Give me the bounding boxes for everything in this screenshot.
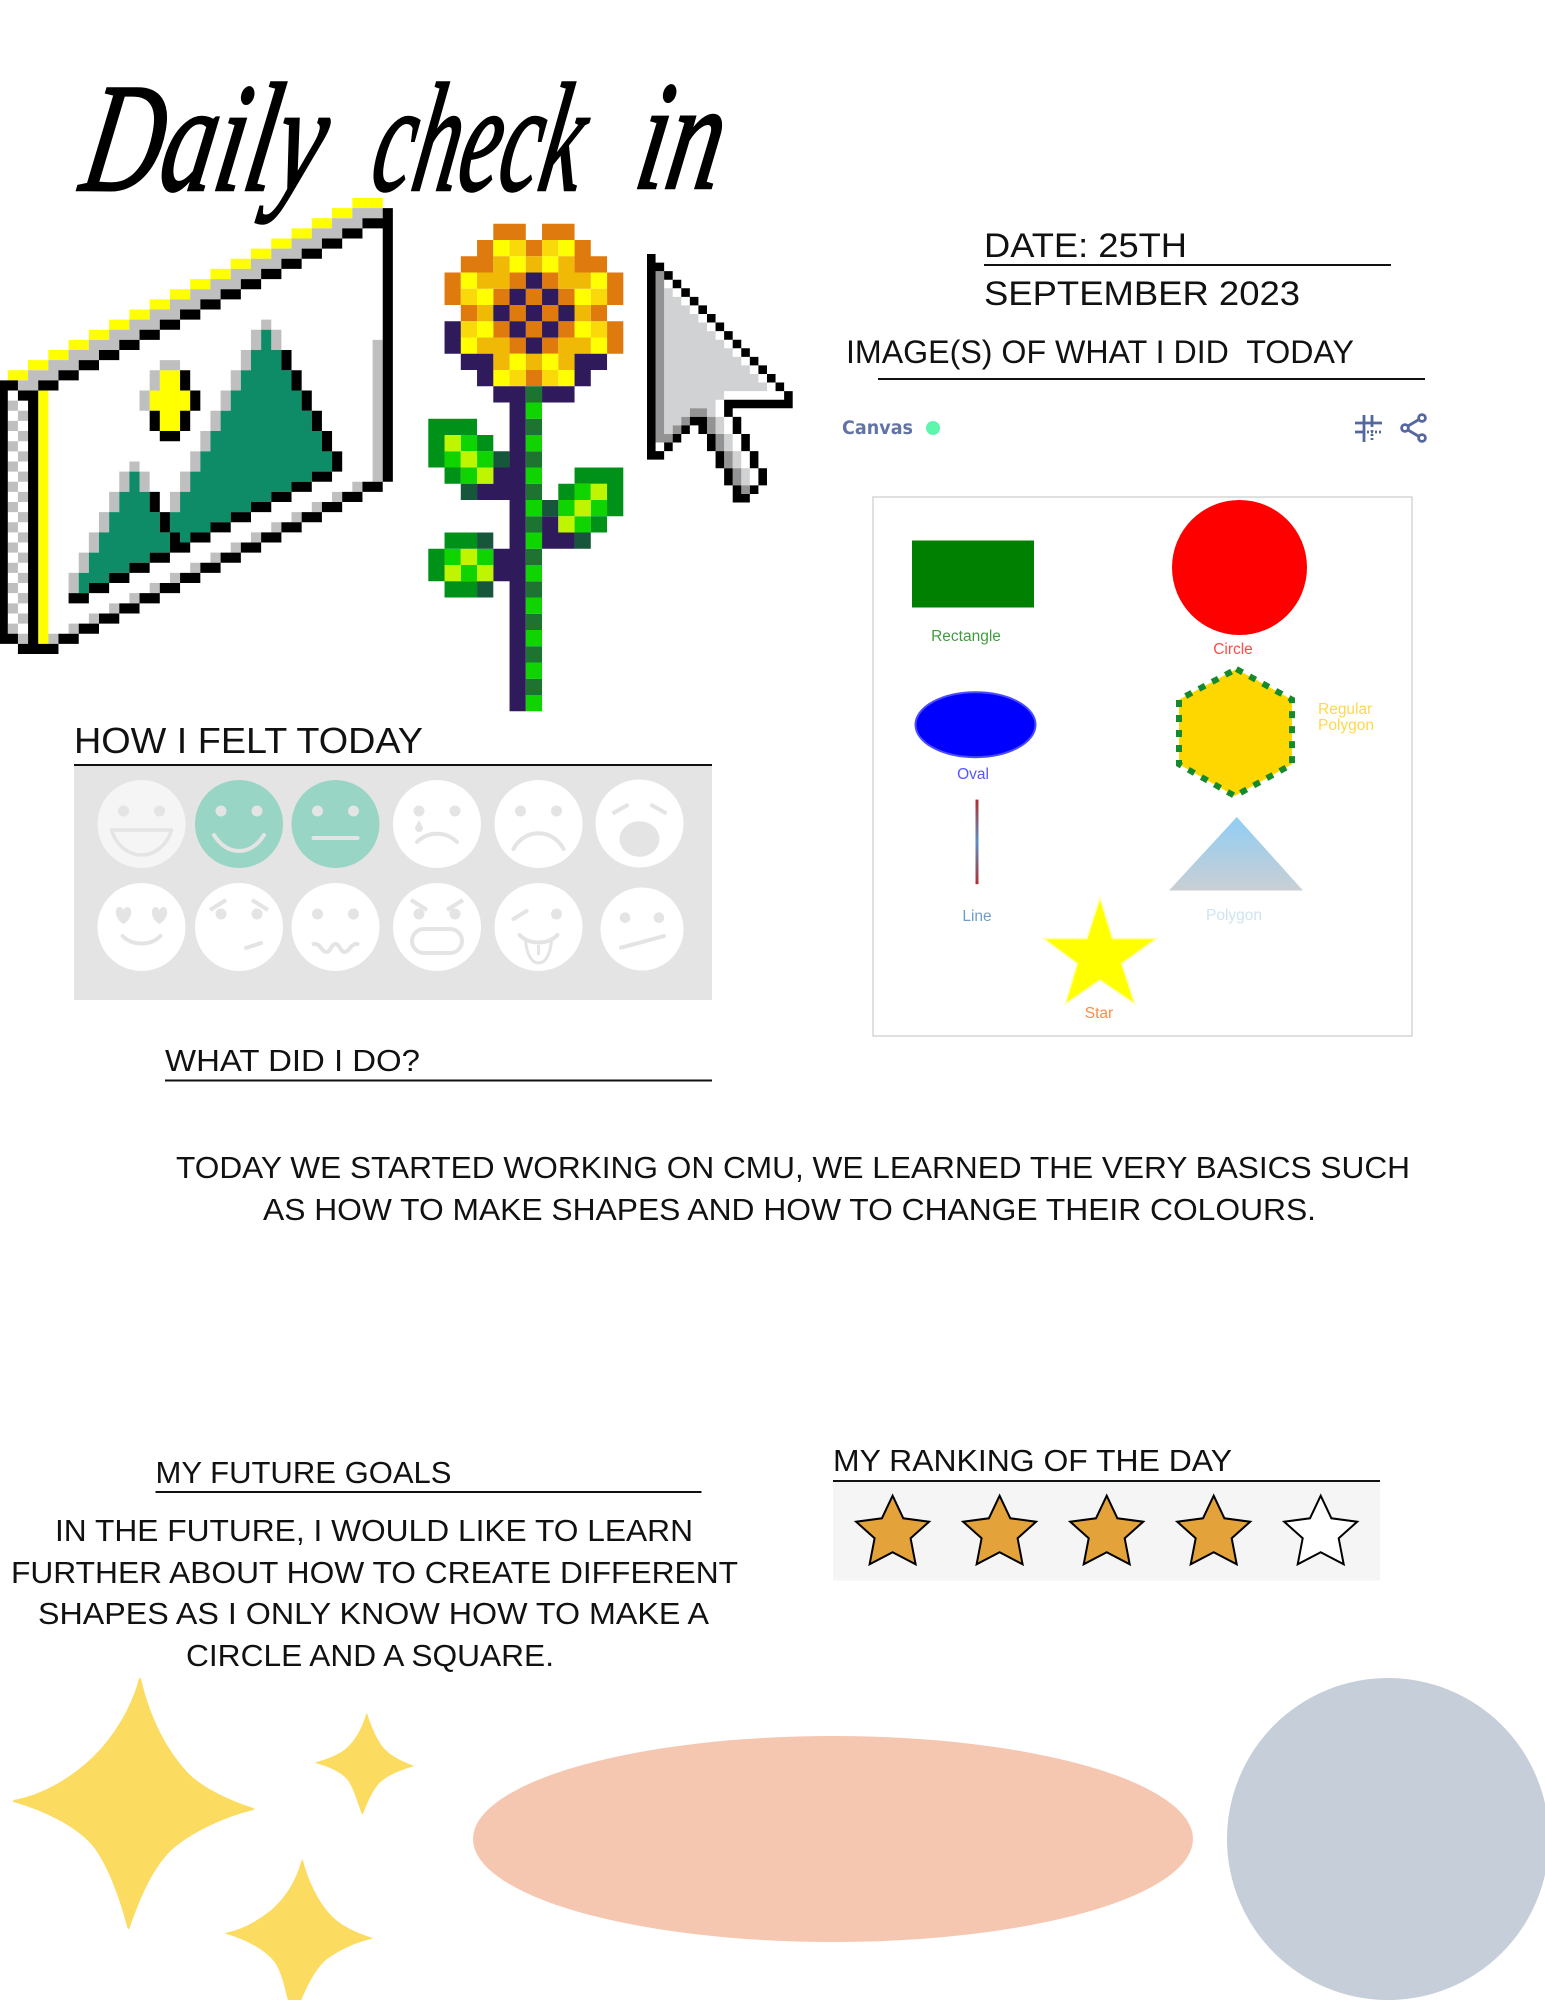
- label: regular polygon: Regular: [1318, 701, 1372, 718]
- heading: ranking: MY RANKING OF THE DAY: [833, 1443, 1232, 1478]
- icon: pixel cursor arrow: [647, 254, 793, 503]
- shape: oval: [916, 692, 1036, 757]
- felt rule: [74, 764, 712, 766]
- shape: rectangle: [912, 540, 1034, 608]
- star 5 empty: [1284, 1496, 1357, 1564]
- heading: images: IMAGE(S) OF WHAT I DID TODAY: [846, 334, 1354, 370]
- decorative ellipse: [473, 1736, 1193, 1942]
- icon: share: [1402, 415, 1425, 441]
- title: [71, 50, 740, 224]
- face: heart eyes: [98, 883, 186, 971]
- label: polygon: Polygon: [1206, 907, 1262, 924]
- mood background: [74, 766, 712, 1000]
- sparkle small: [316, 1714, 413, 1814]
- shape: hexagon: [1179, 669, 1292, 796]
- rating background: [833, 1482, 1380, 1580]
- face: skeptical: [600, 888, 684, 970]
- face: neutral selected: [292, 780, 380, 868]
- label: oval: Oval: [957, 766, 989, 783]
- text block: future goals: SHAPES AS I ONLY KNOW HOW TO MAKE A: [38, 1596, 709, 1631]
- star 3: [1070, 1496, 1143, 1564]
- sparkle medium: [226, 1860, 372, 2000]
- date rule: [984, 264, 1391, 266]
- date line 2: SEPTEMBER 2023: [984, 275, 1300, 313]
- shape: triangle: [1169, 817, 1303, 890]
- goals rule: [156, 1491, 702, 1493]
- text block: future goals: [11, 1513, 738, 1673]
- icon: pixel sunflower: [428, 224, 623, 711]
- label: line: Line: [962, 908, 992, 925]
- face: tongue out: [494, 883, 582, 971]
- text block: future goals: IN THE FUTURE, I WOULD LIKE TO LEARN: [55, 1513, 693, 1548]
- canvas label: Canvas: [842, 417, 913, 439]
- label: star: Star: [1085, 1005, 1113, 1022]
- icon: grid: [1355, 415, 1382, 442]
- text block: what I did: TODAY WE STARTED WORKING ON CMU, WE LEARNED THE VERY BASICS SUCH: [176, 1150, 1410, 1185]
- heading: future goals: MY FUTURE GOALS: [156, 1455, 452, 1490]
- status dot: [926, 421, 940, 435]
- panel: mood faces: [74, 766, 712, 1000]
- text block: what I did: AS HOW TO MAKE SHAPES AND HOW TO CHANGE THEIR COLOURS.: [263, 1192, 1316, 1227]
- canvas frame: [873, 497, 1412, 1036]
- title: Daily: [71, 52, 343, 224]
- heading: what did I do: WHAT DID I DO?: [165, 1043, 420, 1078]
- panel: shapes canvas screenshot: [873, 497, 1412, 1036]
- label: regular polygon: Polygon: [1318, 717, 1374, 734]
- star 2: [963, 1496, 1036, 1564]
- icon: pixel picture frame: [0, 198, 393, 654]
- ranking rule: [833, 1480, 1380, 1482]
- face: queasy: [292, 883, 380, 971]
- label: circle: Circle: [1213, 641, 1253, 658]
- heading: how I felt: HOW I FELT TODAY: [74, 720, 423, 761]
- shape: star: [1044, 898, 1156, 1004]
- face: laughing: [98, 780, 186, 868]
- sparkle large: [14, 1679, 253, 1928]
- face: sad: [494, 780, 582, 868]
- text block: future goals: CIRCLE AND A SQUARE.: [186, 1638, 554, 1673]
- face: worried: [195, 883, 283, 971]
- star 4: [1177, 1496, 1250, 1564]
- star 1: [856, 1496, 929, 1564]
- text block: future goals: FURTHER ABOUT HOW TO CREATE DIFFERENT: [11, 1555, 738, 1590]
- label: rectangle: Rectangle: [931, 628, 1001, 645]
- images rule: [878, 378, 1425, 380]
- title: check: [362, 52, 602, 224]
- shape: circle: [1172, 500, 1307, 635]
- panel: star rating: [833, 1482, 1380, 1580]
- face: crying: [393, 780, 481, 868]
- face: shocked: [596, 780, 684, 868]
- decorative circle: [1227, 1678, 1545, 2000]
- what rule: [165, 1080, 712, 1082]
- panel: canvas header: [842, 415, 1425, 442]
- shape: line: [976, 800, 978, 884]
- text block: what I did: [176, 1150, 1410, 1227]
- face: smile selected: [195, 780, 283, 868]
- date line 1: DATE: 25TH: [984, 227, 1187, 265]
- title: in: [626, 50, 740, 222]
- face: angry: [393, 883, 481, 971]
